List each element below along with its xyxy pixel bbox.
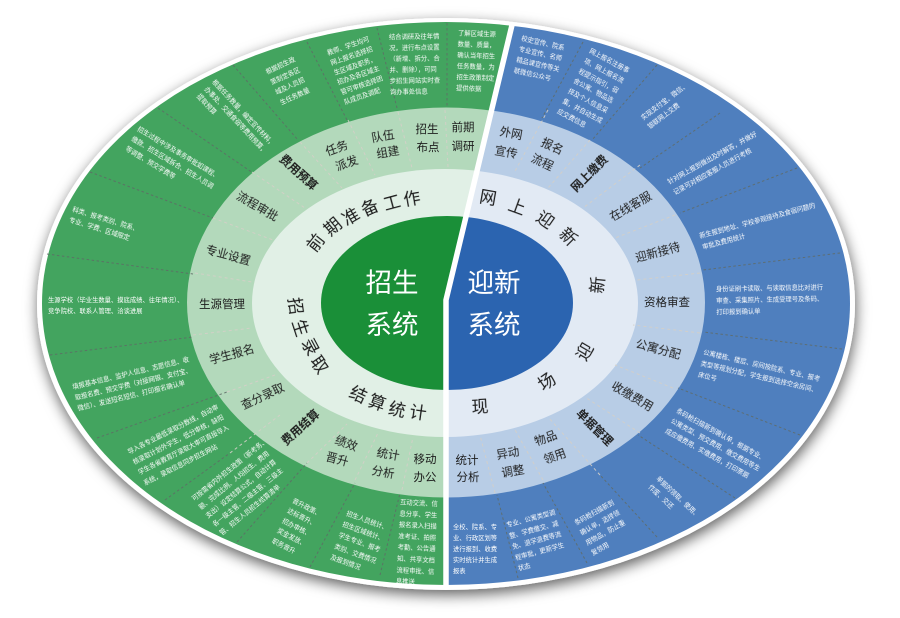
outer text: 队伍组建: 教师、学生均可 xyxy=(326,34,370,57)
inner ring label: 前期准备工作: 作 xyxy=(402,188,422,210)
inner ring label: 招生录取: 生 xyxy=(288,317,312,339)
inner ring label: 网上迎新 xyxy=(478,187,581,250)
middle ring labels: green half: 队伍 xyxy=(370,127,396,145)
outer text: 队伍组建: 生区域及职务， xyxy=(332,54,377,77)
outer text: 流程审批: 招生过程中涉及事务审批如课程、 xyxy=(136,124,222,180)
inner ring label: 招生录取: 取 xyxy=(306,353,332,377)
outer text: 前期调研: 招生政策制定 xyxy=(456,72,495,82)
outer text: 学生报名: 取报名费、预交学费（对接网银、支付宝、 xyxy=(74,365,192,402)
outer text: 收缴费用: 条码枪扫描新到确认单，根据专业、 xyxy=(675,406,768,463)
outer text: 查分录取: 学生各省教育厅录取大审可直接导入 xyxy=(136,422,231,476)
inner ring label: 前期准备工作: 工 xyxy=(381,192,403,214)
outer text: 外网宣传: 校史宣传、院系 xyxy=(521,33,566,52)
middle ring labels: green half: 专业设置 xyxy=(204,242,252,268)
middle ring labels: green half: 派发 xyxy=(333,152,360,174)
outer text: 费用结算: 各一级主管、二级主管、三级主 xyxy=(210,466,285,528)
outer text: 异动调整: 整、学费缴交、减 xyxy=(508,518,560,540)
inner ring label: 结算统计: 结 xyxy=(346,383,370,407)
outer text: 前期调研: 提供依据 xyxy=(456,83,482,93)
inner ring label: 前期准备工作: 前 xyxy=(303,230,329,256)
middle ring labels: green half: 任务 xyxy=(323,137,350,159)
outer text: 统计分析（迎新）: 进行报到、收费 xyxy=(453,544,497,553)
outer text: 任务派发: 域及人员招 xyxy=(274,75,306,96)
middle ring labels: green half: 布点 xyxy=(416,141,440,154)
outer text: 报名流程: 应交费信息 xyxy=(556,106,588,129)
middle ring labels: green half: 绩效 xyxy=(333,433,360,454)
outer text: 队伍组建: 管可审核选择团 xyxy=(339,73,384,96)
core title: 招生系统 xyxy=(366,268,418,340)
core title: 招生系统: 招生 xyxy=(366,268,418,298)
outer text: 费用结算: 额、完成比例、人均招生、费用 xyxy=(197,449,271,511)
inner ring label: 前期准备工作: 准 xyxy=(339,205,363,229)
middle ring labels: green half: 学生报名 xyxy=(208,341,256,367)
outer text: 招生布点: 询办事处信息 xyxy=(390,86,428,96)
outer text: 报名流程: 择及个人信息采 xyxy=(567,86,610,115)
outer text: 报名流程: 项、网上报名流 xyxy=(583,56,626,85)
middle ring labels: green half xyxy=(199,120,475,484)
outer text: 移动办公: 考勤、公告通 xyxy=(398,542,436,553)
inner ring label: 招生录取 xyxy=(284,296,332,377)
outer text: 招生布点: 并、删除），可同 xyxy=(389,64,437,74)
core title: 迎新系统 xyxy=(468,268,520,340)
outer text: 物品领用: 用物品，防止重 xyxy=(584,518,627,547)
outer text: 前期调研: 任务数量，为 xyxy=(457,61,495,71)
outer text: 资格审查: 身份证刷卡读取、与读取信息比对进行 xyxy=(716,282,824,293)
outer text: 统计分析（迎新）: 报表 xyxy=(453,566,466,575)
outer text: 外网宣传: 联微信公众号 xyxy=(513,65,552,83)
middle ring labels: blue half: 迎新接待 xyxy=(634,239,682,265)
outer text: 招生布点: 况，进行布点设置 xyxy=(389,42,440,52)
inner ring label: 现场迎新: 现 xyxy=(471,397,489,417)
core title: 招生系统: 系统 xyxy=(366,310,418,340)
outer text: 报名流程: 网上报名注册事 xyxy=(588,46,632,75)
outer text: 移动办公: 流程审批、信 xyxy=(396,565,435,576)
inner ring label: 招生录取: 招 xyxy=(284,296,306,316)
inner ring label: 结算统计: 算 xyxy=(366,391,388,415)
outer text: 统计分析: 招生区域统计、 xyxy=(341,519,386,543)
middle ring labels: green half: 调研 xyxy=(452,140,475,153)
middle ring labels: blue half: 调整 xyxy=(500,462,526,480)
outer text: 迎新接待: 新生报到地址、学校参观接待及食宿问题的 xyxy=(698,200,816,240)
outer text: 统计分析: 学生专业、报考 xyxy=(337,530,382,554)
outer text: 公寓分配: 床位号 xyxy=(697,370,718,383)
inner ring label: 现场迎新: 场 xyxy=(535,369,559,395)
middle ring labels: blue half: 报名 xyxy=(539,135,566,157)
outer text: 统计分析（迎新）: 实时统计并生成 xyxy=(453,555,498,564)
inner ring label: 现场迎新 xyxy=(471,276,608,417)
outer text: 费用结算: 支出）设定结算公式，自动计算 xyxy=(203,457,278,520)
outer text: 单据管理: 单据的领取、使用、 xyxy=(655,474,702,519)
outer text: 绩效晋升: 招办审核、 xyxy=(281,516,313,538)
inner ring label: 现场迎新: 迎 xyxy=(573,340,597,364)
middle ring labels: green half: 统计 xyxy=(376,446,401,463)
outer text: 生源管理: 竞争院校、联系人管理、洽谈进展 xyxy=(48,306,143,315)
outer text: 资格审查: 审查、采集照片、生成受理号及条码、 xyxy=(716,294,823,304)
middle ring labels: green half: 组建 xyxy=(375,143,401,161)
middle ring labels: green half: 查分录取 xyxy=(239,380,287,412)
outer text: 绩效晋升: 职务晋升 xyxy=(271,536,297,555)
inner ring label: 网上迎新: 新 xyxy=(555,224,581,250)
outer text: 查分录取: 系统，录取信息同步招生网站 xyxy=(142,441,219,487)
outer text: 前期调研: 确认当年招生 xyxy=(457,50,495,60)
middle ring labels: blue half: 收缴费用 xyxy=(609,379,656,414)
outer text: 查分录取: 核录取计划外学生，低分审核，缺阳 xyxy=(131,412,225,466)
outer text: 学生报名: 填报基本信息、监护人信息、志愿信息、收 xyxy=(71,354,190,391)
outer text: 移动办公: 息分享、学生 xyxy=(399,508,438,519)
middle ring labels: blue half xyxy=(456,125,690,484)
outer text: 招生布点: （新增、拆分、合 xyxy=(389,53,440,63)
outer text: 统计分析（迎新）: 业、行政区划等 xyxy=(453,533,498,542)
outer text: 移动办公: 息推送 xyxy=(396,576,416,586)
middle ring labels: blue half: 单据管理 xyxy=(573,406,616,449)
outer text: 招生布点: 结合调研及往年情 xyxy=(389,31,440,41)
outer text: 绩效晋升: 达标晋升、 xyxy=(286,506,318,528)
inner ring label: 网上迎新: 网 xyxy=(478,187,498,209)
outer text: 前期调研: 了解区域生源 xyxy=(458,28,497,38)
outer text: 报名流程: 集，并自动生成 xyxy=(561,96,605,125)
outer text: 队伍组建: 队成员及调配 xyxy=(343,85,382,106)
middle ring labels: blue half: 统计 xyxy=(456,454,479,467)
outer text: 前期调研: 数量、质量， xyxy=(458,39,496,49)
outer text: 移动办公: 知、共享文档 xyxy=(397,553,435,564)
middle ring labels: blue half: 异动 xyxy=(495,445,520,462)
outer text: 在线客服: 记录可对相应客服人员进行考核 xyxy=(671,145,754,196)
outer text: 招生布点: 步招生网站实时查 xyxy=(390,75,441,85)
outer text: 绩效晋升: 晋升政策、 xyxy=(291,496,323,518)
outer text: 收缴费用: 公寓类型、预交费用、缴交费用等生 xyxy=(669,416,762,473)
middle ring labels: green half: 费用结算 xyxy=(279,407,322,448)
outer text: 物品领用: 条码枪扫描新到 xyxy=(573,498,616,527)
middle ring labels: green half: 移动 xyxy=(414,453,436,466)
panel: blue half rings xyxy=(448,26,850,585)
middle ring labels: blue half: 流程 xyxy=(529,151,556,174)
outer text: 费用预算: 提取预算 xyxy=(195,92,219,116)
outer text: 费用结算: 管、招生人员招生结算清单 xyxy=(217,482,282,537)
outer text: 专业设置: 科类、报考类别、院系、 xyxy=(71,204,140,233)
middle ring labels: green half: 晋升 xyxy=(324,450,350,469)
outer text: 外网宣传: 精品课宣传等关 xyxy=(516,55,561,73)
outer text: 统计分析（迎新）: 全校、院系、专 xyxy=(453,522,497,531)
core title: 迎新系统: 迎新 xyxy=(468,268,520,298)
outer text: 任务派发: 策制定各区 xyxy=(269,65,301,86)
inner ring label: 网上迎新: 上 xyxy=(506,195,528,219)
outer text: 移动办公: 互动交流、信 xyxy=(400,497,438,508)
inner ring label: 前期准备工作 xyxy=(303,188,422,256)
outer text: 费用预算: 根据任务数量，编定宣传材料， xyxy=(211,77,277,148)
outer text: 资格审查: 打印报到确认单 xyxy=(716,306,761,316)
outer text: 物品领用: 确认单，选择领 xyxy=(578,507,622,537)
inner ring label: 结算统计: 计 xyxy=(408,402,428,424)
outer text: 物品领用: 复领用 xyxy=(589,540,610,557)
middle ring labels: blue half: 领用 xyxy=(542,446,568,467)
outer text: 在线客服: 针对网上报到做出及时解答，并做好 xyxy=(666,129,759,186)
outer text: 公寓分配: 类型等规划分配，学生报到选择空余房间、 xyxy=(700,358,819,394)
inner ring label: 现场迎新: 新 xyxy=(588,276,608,294)
outer text: 外网宣传: 专业宣传、名师 xyxy=(518,44,563,63)
outer text: 费用预算: 办事处、交通食宿等费用预算， xyxy=(203,84,269,155)
outer text: 流程审批: 等调整、预交学费等 xyxy=(124,144,178,181)
inner ring label: 结算统计 xyxy=(346,383,428,424)
middle ring labels: green half: 招生 xyxy=(416,122,438,136)
outer text: 任务派发: 根据招生政 xyxy=(264,54,297,76)
outer text: 迎新接待: 审批及费用统计 xyxy=(701,231,747,251)
outer text: 异动调整: 程审批，更新学生 xyxy=(514,540,565,562)
panel: green half rings xyxy=(42,22,509,585)
outer text: 报名流程: 程提示指引，宿 xyxy=(577,66,621,95)
middle ring labels: green half: 分析 xyxy=(371,463,396,481)
middle ring labels: blue half: 外网 xyxy=(499,125,524,142)
middle ring labels: blue half: 宣传 xyxy=(494,143,519,161)
outer text: 队伍组建: 招办及各区域主 xyxy=(336,64,380,86)
white divider between the two halves xyxy=(446,23,512,589)
middle ring labels: green half: 流程审批 xyxy=(234,189,281,224)
outer text: 移动办公: 报名录入扫描 xyxy=(399,520,437,531)
outer text: 异动调整: 专业、公寓类型调 xyxy=(505,507,556,529)
outer text: 异动调整: 状态 xyxy=(517,560,532,573)
outer text: 队伍组建: 网上报名选择招 xyxy=(329,44,374,67)
outer text: 收缴费用: 成应缴费用、实缴费用，打印票据 xyxy=(664,426,751,480)
middle ring labels: blue half: 公寓分配 xyxy=(634,336,683,362)
middle ring labels: green half: 前期 xyxy=(452,120,474,134)
outer text: 异动调整: 免、退学退费等流 xyxy=(511,529,563,551)
outer text: 网上缴费: 实现支付宝、微信、 xyxy=(639,80,689,122)
inner ring label: 招生录取: 录 xyxy=(298,335,322,359)
middle ring labels: blue half: 物品 xyxy=(532,428,559,449)
middle ring labels: green half: 生源管理 xyxy=(199,297,245,311)
outer text: 任务派发: 生任务数量 xyxy=(278,85,311,107)
outer text: 流程审批: 缴款、招生区域拆合、招生人员调 xyxy=(130,134,216,190)
outer text: 网上缴费: 银联网上交费 xyxy=(645,100,681,130)
core title: 迎新系统: 系统 xyxy=(468,310,520,340)
outer text: 统计分析: 类别、交费情况 xyxy=(333,541,379,565)
outer text: 统计分析: 招生人员统计、 xyxy=(345,508,390,532)
middle ring labels: blue half: 在线客服 xyxy=(607,188,654,224)
inner ring label: 前期准备工作: 期 xyxy=(320,214,346,240)
outer text: 公寓分配: 公寓楼栋、楼层、房间按院系、专业、报考 xyxy=(703,347,821,383)
outer text: 学生报名: 微信）、发送短名短信、打印报名确认单 xyxy=(77,378,186,412)
middle ring labels: blue half: 分析 xyxy=(456,470,480,484)
outer text: 生源管理: 生源学校（毕业生数量、摸底成绩、往年情况）、 xyxy=(48,295,183,304)
outer text: 移动办公: 准考证、拍照 xyxy=(398,531,437,542)
middle ring labels: blue half: 网上缴费 xyxy=(568,152,611,195)
outer text: 绩效晋升: 奖金发放、 xyxy=(276,526,308,548)
inner ring label: 网上迎新: 迎 xyxy=(533,207,557,233)
middle ring labels: blue half: 资格审查 xyxy=(644,295,690,309)
outer text: 单据管理: 作废、交还 xyxy=(647,482,676,511)
outer text: 报名流程: 舍公寓、物品选 xyxy=(572,76,616,105)
middle ring labels: green half: 办公 xyxy=(414,470,437,484)
inner ring label: 结算统计: 统 xyxy=(387,399,407,421)
inner ring label: 前期准备工作: 备 xyxy=(358,196,382,220)
outer text: 费用结算: 可按需省内外招生政策（新考务、 xyxy=(190,436,269,503)
outer text: 专业设置: 专业、学费、区域限定 xyxy=(68,215,132,242)
middle ring labels: green half: 费用预算 xyxy=(277,152,320,193)
outer text: 查分录取: 导入各专业最低录取分数线，自动审 xyxy=(126,402,220,456)
outer text: 统计分析: 及报到情况 xyxy=(329,552,363,571)
